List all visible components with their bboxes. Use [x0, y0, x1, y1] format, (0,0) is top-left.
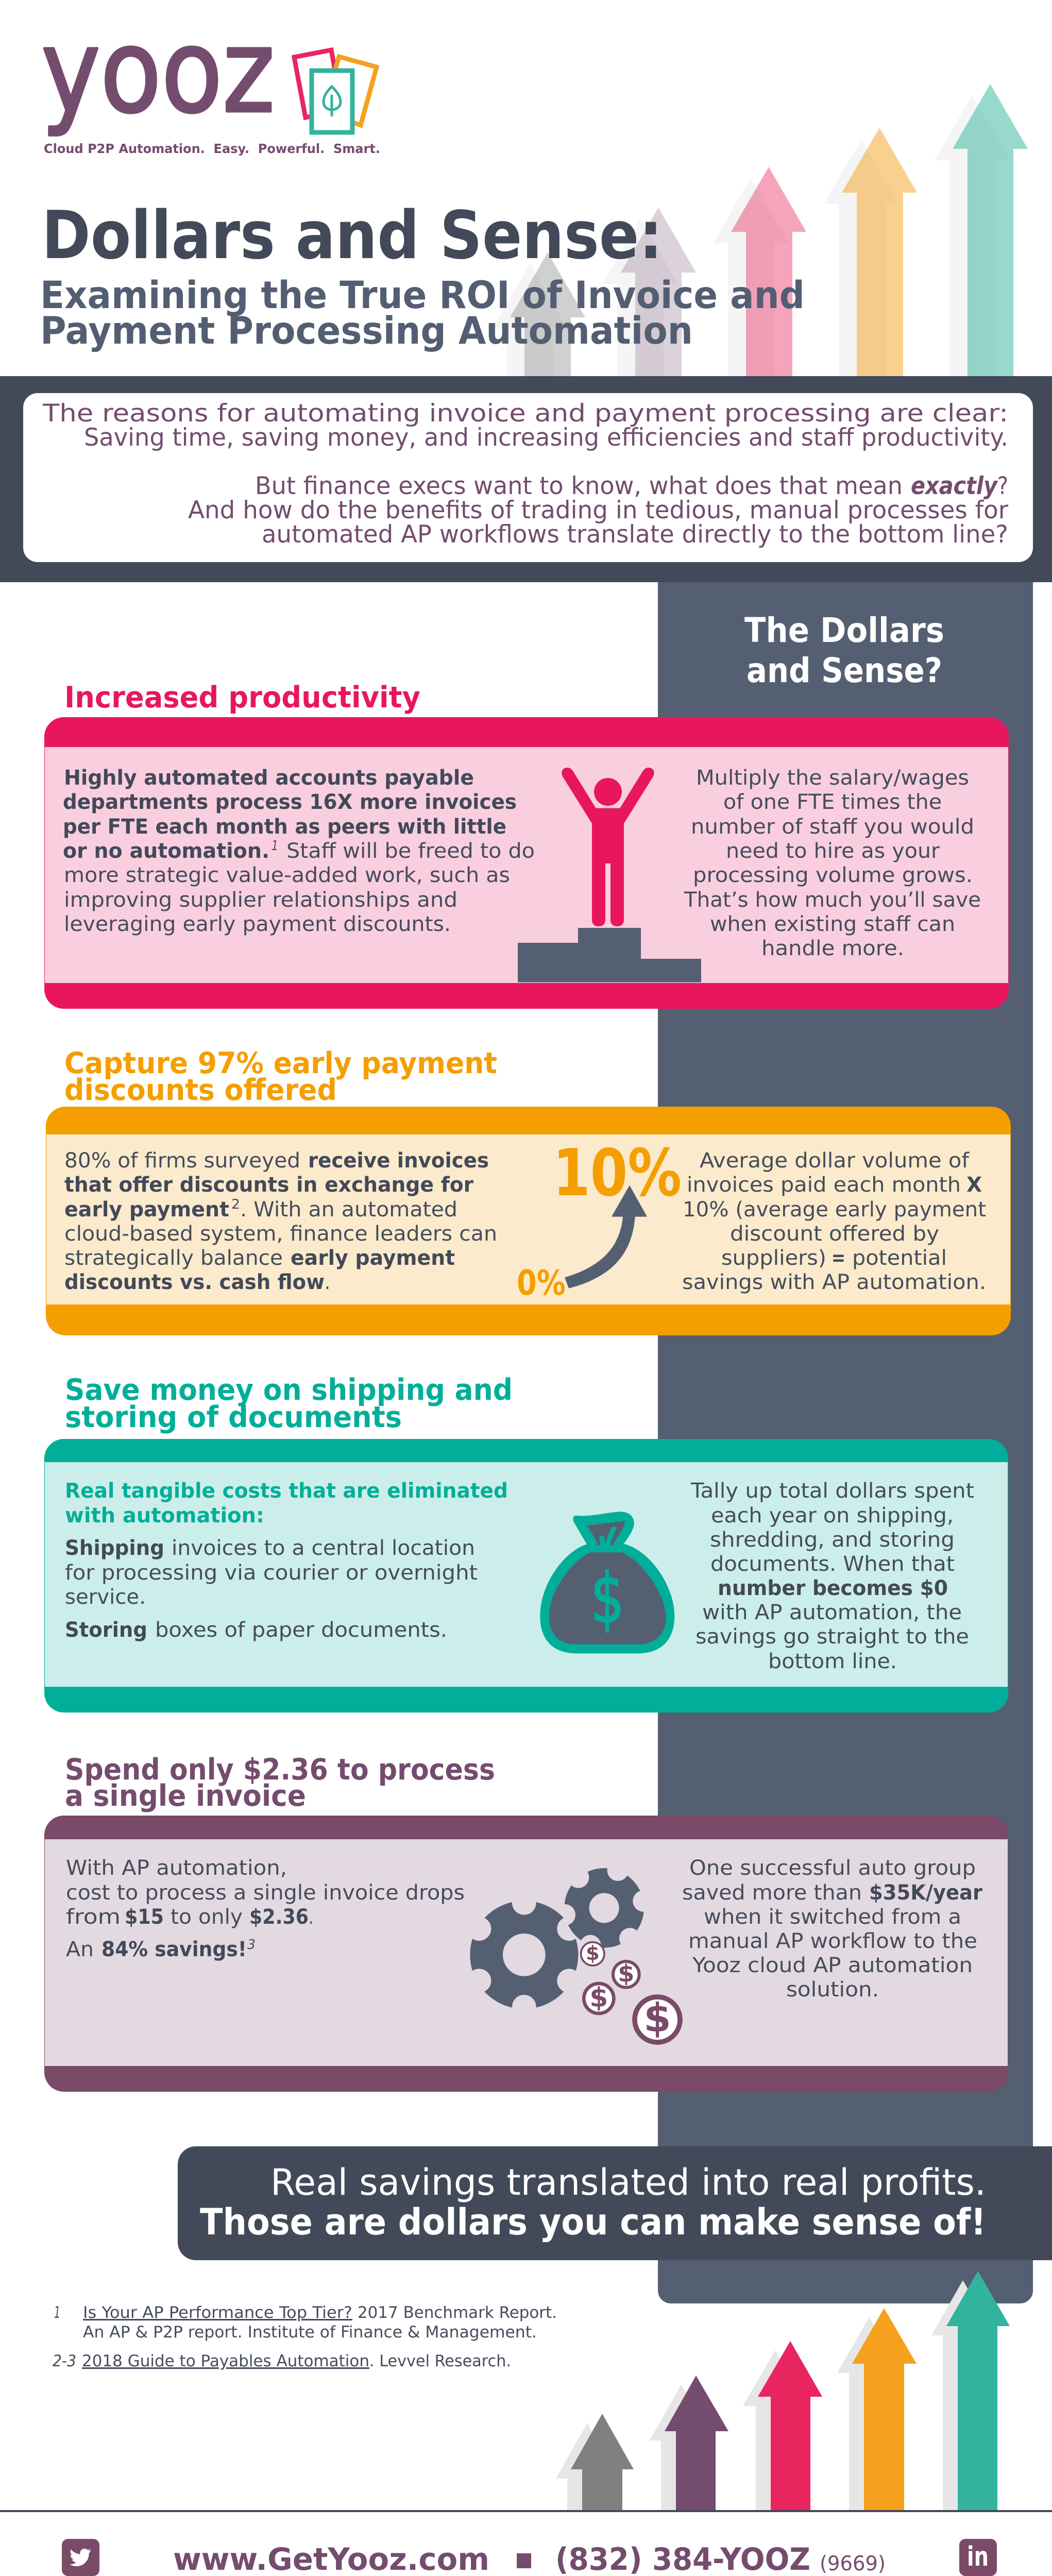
text: shipping right: savings go straight to the — [695, 1625, 969, 1649]
chart: 0% to 10% arrow: 10% — [553, 1135, 682, 1211]
text: cost left: cost to process a single invoice drops — [66, 1881, 465, 1905]
text: discounts left: strategically balance — [64, 1246, 283, 1270]
text: productivity left — [63, 766, 535, 936]
text: discounts left: . — [325, 1270, 330, 1294]
icon: gears and coins: $ — [586, 1942, 600, 1965]
text: productivity right: That’s how much you’ll save — [684, 888, 981, 912]
text: cost left: 84% savings! — [101, 1938, 247, 1961]
icon: twitter — [62, 2539, 99, 2576]
intro band — [0, 376, 1052, 582]
icon: gears and coins — [470, 1868, 683, 2045]
panel: cost per invoice — [44, 1816, 1008, 2092]
text: discounts right: potential — [852, 1246, 947, 1270]
text: cost right: One successful auto group — [689, 1856, 976, 1880]
arrows: bottom — [556, 2271, 1010, 2510]
text: cost left — [66, 1856, 465, 1961]
text: discounts left: 80% of firms surveyed — [64, 1149, 300, 1173]
column heading: and Sense? — [746, 651, 942, 690]
text: cost right: $35K/year — [869, 1881, 982, 1905]
text: discounts left: early payment — [64, 1198, 229, 1222]
text: productivity left: Highly automated accounts payable — [64, 766, 474, 790]
logo: yooz: yooz — [41, 5, 275, 139]
footnotes — [53, 2303, 557, 2370]
text: shipping right: Tally up total dollars spent — [690, 1479, 974, 1503]
text: discounts left: 2 — [231, 1197, 240, 1212]
icon: money bag — [540, 1512, 674, 1653]
text: cost left: With AP automation, — [66, 1856, 287, 1880]
column heading: The Dollars — [744, 611, 944, 650]
subtitle — [40, 274, 805, 353]
heading: increased productivity: Increased productivity — [64, 681, 420, 715]
callout: real savings: Those are dollars you can make sense of! — [200, 2201, 986, 2243]
icon: gears and coins: $ — [643, 1995, 671, 2041]
intro text panel: But finance execs want to know, what does that mean — [255, 472, 903, 500]
heading: shipping and storing: storing of documents — [65, 1400, 402, 1434]
text: productivity right: processing volume grows. — [693, 863, 973, 887]
callout: real savings: Real savings translated into real profits. — [270, 2161, 986, 2204]
text: discounts left: discounts vs. cash flow — [64, 1270, 325, 1294]
text: shipping left: service. — [65, 1585, 146, 1609]
intro text panel: ? — [997, 472, 1008, 500]
text: productivity left: improving supplier relationships and — [64, 888, 457, 912]
footnotes: 1 — [54, 2303, 60, 2322]
text: productivity right: number of staff you would — [691, 815, 974, 839]
intro text panel: Saving time, saving money, and increasing efficiencies and staff productivity. — [84, 423, 1008, 452]
footnotes: 2-3 — [53, 2352, 76, 2370]
text: shipping left — [65, 1479, 508, 1642]
text: cost left: to only — [171, 1905, 243, 1929]
text: cost left: 3 — [247, 1937, 256, 1953]
panel: early payment discounts — [46, 1107, 1011, 1335]
text: shipping left: for processing via courier or overnight — [65, 1561, 478, 1585]
text: shipping left: Shipping — [65, 1536, 164, 1560]
text: productivity left: leveraging early payment discounts. — [64, 912, 451, 936]
text: productivity left: more strategic value-added work, such as — [64, 863, 510, 887]
text: productivity right: Multiply the salary/wages — [696, 766, 969, 790]
heading: early payment discounts: Capture 97% early payment — [64, 1046, 497, 1080]
text: discounts right — [682, 1149, 986, 1294]
text: productivity right: of one FTE times the — [723, 790, 942, 814]
heading: shipping and storing — [65, 1373, 513, 1434]
heading: cost per invoice: Spend only $2.36 to process — [65, 1753, 495, 1787]
logo: yooz — [41, 5, 377, 139]
text: cost right: manual AP workflow to the — [688, 1929, 977, 1953]
text: cost right: solution. — [786, 1978, 879, 2002]
contact line — [173, 2541, 886, 2576]
icon: logo cards — [294, 50, 377, 132]
text: cost left: An — [66, 1938, 94, 1961]
text: productivity left: 1 — [272, 838, 278, 854]
subtitle: Payment Processing Automation — [40, 309, 693, 353]
text: productivity right — [684, 766, 981, 960]
text: cost left: from — [66, 1905, 121, 1929]
text: shipping right: number becomes $0 — [718, 1577, 948, 1600]
text: cost left: $2.36 — [249, 1905, 309, 1929]
text: cost right: when it switched from a — [704, 1905, 961, 1929]
intro text panel: exactly — [911, 472, 998, 500]
text: shipping left: boxes of paper documents. — [155, 1618, 447, 1642]
background arrows: top — [492, 84, 1028, 376]
text: discounts right: discount offered by — [730, 1222, 939, 1246]
text: productivity left: Staff will be freed to do — [286, 839, 535, 863]
chart: 0% to 10% arrow — [517, 1135, 682, 1303]
heading: early payment discounts: discounts offered — [64, 1073, 337, 1107]
footnotes: An AP & P2P report. Institute of Finance & Management. — [83, 2323, 537, 2342]
text: cost right — [682, 1856, 982, 2002]
text: discounts left: receive invoices — [308, 1149, 489, 1173]
heading: cost per invoice — [65, 1753, 495, 1813]
panel: shipping and storing — [44, 1439, 1008, 1713]
text: cost right: saved more than — [682, 1881, 862, 1905]
text: shipping right: with AP automation, the — [702, 1601, 962, 1624]
text: shipping right: documents. When that — [710, 1552, 955, 1576]
text: cost left: . — [309, 1905, 313, 1929]
heading: early payment discounts — [64, 1046, 497, 1107]
icon: gears and coins: $ — [589, 1982, 608, 2013]
intro text panel: And how do the benefits of trading in tedious, manual processes for — [188, 496, 1009, 524]
text: productivity left: departments process 16X more invoices — [63, 790, 517, 814]
text: discounts right: suppliers) — [721, 1246, 826, 1270]
tagline: Cloud P2P Automation. Easy. Powerful. Smart. — [44, 141, 380, 156]
intro text panel — [23, 393, 1033, 562]
text: shipping right: bottom line. — [768, 1650, 897, 1673]
panel: increased productivity — [44, 717, 1009, 1009]
icon: person on podium — [518, 768, 701, 982]
text: productivity left: per FTE each month as peers with little — [63, 815, 506, 839]
text: productivity right: need to hire as your — [726, 839, 940, 863]
heading: cost per invoice: a single invoice — [65, 1779, 306, 1813]
intro text panel: The reasons for automating invoice and payment processing are clear: — [42, 399, 1008, 428]
text: discounts right: invoices paid each month — [687, 1173, 961, 1197]
icon: linkedin — [959, 2539, 997, 2576]
text: cost left: $15 — [125, 1905, 164, 1929]
chart: 0% to 10% arrow: 0% — [517, 1263, 566, 1303]
text: cost right: Yooz cloud AP automation — [692, 1954, 973, 1977]
text: shipping right: shredding, and storing — [710, 1528, 955, 1552]
callout: real savings — [178, 2146, 1052, 2260]
heading: shipping and storing: Save money on shipping and — [65, 1373, 513, 1407]
text: shipping left: invoices to a central location — [172, 1536, 475, 1560]
footnotes: . Levvel Research. — [369, 2352, 511, 2370]
text: shipping left: Storing — [65, 1618, 147, 1642]
footnotes: 2018 Guide to Payables Automation — [82, 2352, 369, 2370]
text: discounts right: 10% (average early payment — [683, 1198, 986, 1222]
text: discounts left: that offer discounts in exchange for — [64, 1173, 473, 1197]
icon: gears and coins: $ — [618, 1959, 634, 1987]
text: discounts left: . With an automated — [240, 1198, 457, 1222]
icon: linkedin: in — [967, 2541, 989, 2572]
intro text panel: automated AP workflows translate directly to the bottom line? — [262, 520, 1008, 549]
text: discounts right: X — [966, 1173, 982, 1197]
text: discounts left: early payment — [291, 1246, 455, 1270]
subtitle: Examining the True ROI of Invoice and — [40, 274, 805, 317]
text: shipping right: each year on shipping, — [711, 1504, 954, 1528]
text: discounts left: cloud-based system, finance leaders can — [64, 1222, 497, 1246]
contact line: (9669) — [820, 2552, 886, 2575]
icon: money bag: $ — [590, 1559, 624, 1638]
text: productivity right: handle more. — [761, 937, 904, 960]
text: discounts right: Average dollar volume of — [700, 1149, 970, 1173]
text: productivity left: or no automation. — [63, 839, 269, 863]
text: discounts right: savings with AP automation. — [682, 1270, 986, 1294]
column heading — [744, 611, 944, 690]
text: shipping left: Real tangible costs that are eliminated — [65, 1479, 508, 1503]
footer rule — [0, 2510, 1052, 2512]
text: shipping left: with automation: — [65, 1504, 264, 1528]
text: discounts right: = — [832, 1246, 845, 1270]
text: productivity right: when existing staff can — [710, 912, 955, 936]
text: discounts left — [64, 1149, 497, 1294]
footnotes: 2017 Benchmark Report. — [358, 2303, 557, 2322]
footnotes: Is Your AP Performance Top Tier? — [83, 2303, 352, 2322]
right column background — [658, 567, 1033, 2303]
text: shipping right — [690, 1479, 974, 1673]
title: Dollars and Sense: — [42, 197, 663, 274]
